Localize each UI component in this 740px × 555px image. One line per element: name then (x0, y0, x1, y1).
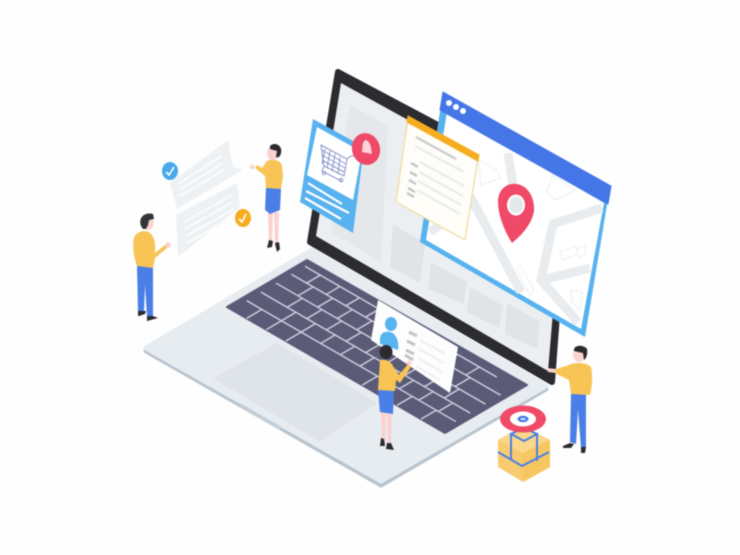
map building outlines (478, 160, 586, 310)
shopping cart icon (321, 145, 356, 182)
bell notification badge (348, 130, 384, 168)
map browser window (420, 92, 611, 337)
yellow list document (396, 116, 479, 240)
woman at keyboard (371, 300, 458, 450)
cardboard box (498, 426, 550, 482)
keyboard (227, 260, 527, 433)
laptop base (146, 250, 546, 485)
woman top (250, 144, 283, 252)
chat document bottom (176, 183, 240, 257)
map roads (430, 153, 602, 322)
user profile card (371, 300, 458, 393)
map location pin (498, 184, 534, 243)
trackpad (213, 343, 377, 442)
blue check badge (162, 162, 178, 180)
window title bar (440, 92, 611, 204)
document text lines (407, 137, 464, 214)
left chat documents (162, 140, 251, 257)
screen tiles row (390, 225, 540, 349)
delivery package with target (498, 406, 550, 482)
shopping cart card (300, 119, 384, 233)
man on left (133, 214, 171, 321)
window control dots (446, 100, 466, 114)
screen column tile (331, 105, 388, 262)
man on right (547, 346, 592, 453)
chat document top (170, 140, 243, 209)
orange check badge (235, 209, 251, 227)
card text lines (305, 183, 349, 219)
laptop screen with bezel (310, 72, 566, 382)
location target marker (500, 406, 546, 432)
